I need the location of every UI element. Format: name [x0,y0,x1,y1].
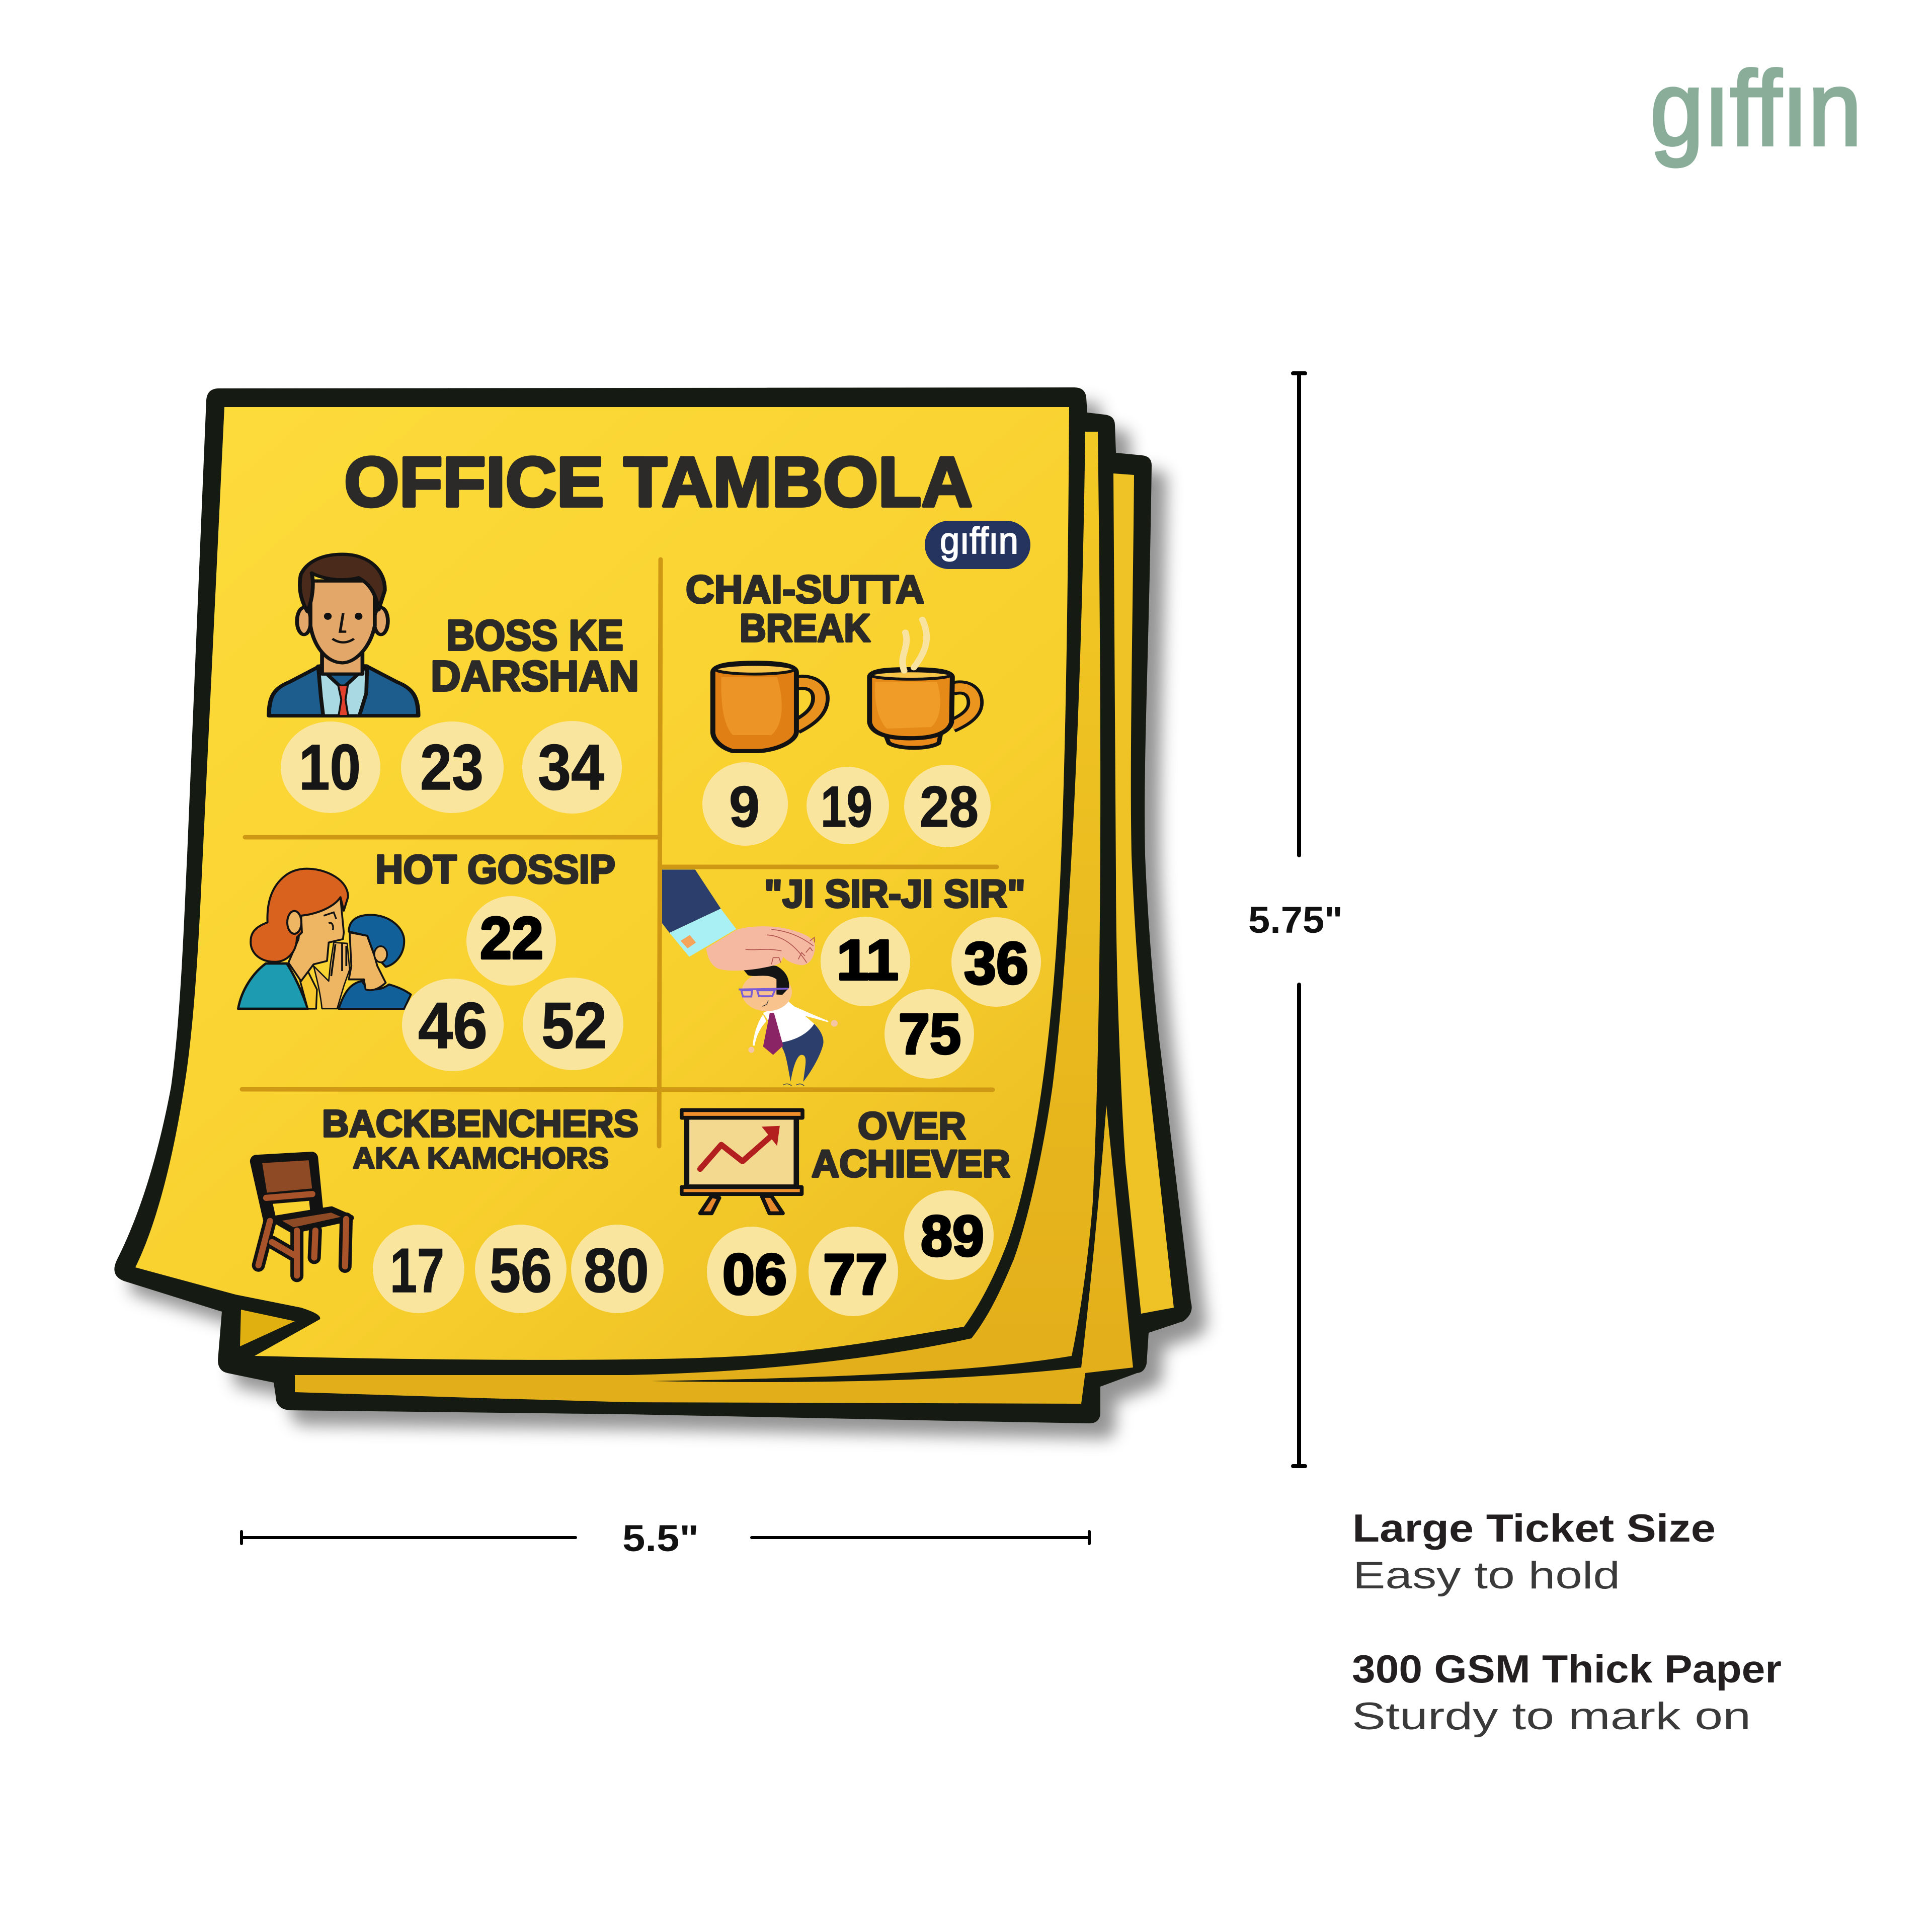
number 10: 10 [299,732,361,803]
panel: chai-sutta break [686,567,991,847]
number 77 [809,1227,898,1316]
number 23: 23 [420,732,484,803]
number 34 [522,721,622,814]
number 17: 17 [390,1236,444,1306]
feature: 300 gsm thick paper [1352,1647,1782,1738]
height dimension: 5.75" [1248,899,1343,941]
back sheet yellow edge [1113,473,1174,1314]
middle sheet yellow edge [295,432,1133,1404]
number 52: 52 [541,989,607,1062]
number 89: 89 [921,1204,984,1268]
number 80 [571,1225,664,1313]
feature: 300 gsm thick paper: Sturdy to mark on [1352,1695,1751,1738]
heading: BREAK [740,606,870,650]
number 06: 06 [722,1243,787,1307]
number 56 [475,1225,567,1313]
number 23 [401,721,504,813]
feature: large ticket size [1352,1506,1716,1597]
heading: CHAI-SUTTA [686,567,924,611]
number 10 [281,721,380,813]
number 75: 75 [899,1002,961,1066]
number 28: 28 [920,775,979,839]
icon: chair [257,1158,351,1275]
number 17 [373,1225,464,1313]
number 36 [951,917,1041,1007]
folded corner triangle [240,1310,295,1346]
panel: backbenchers [257,1102,664,1313]
heading: BOSS KE [446,612,623,660]
number 75 [884,989,974,1079]
panel: ji sir-ji sir [662,869,1041,1086]
number 9 [702,762,788,846]
number 22: 22 [480,905,543,972]
number 22 [466,896,556,986]
top sheet yellow [135,407,1069,1360]
icon: boss [269,554,418,716]
width dimension: 5.5" [622,1517,699,1559]
number 28 [904,765,991,847]
brand badge [925,520,1030,569]
width dimension [242,1517,1089,1559]
heading: AKA KAMCHORS [353,1142,609,1175]
sheet outlines silhouette [114,387,1192,1423]
height dimension [1248,373,1343,1466]
icon: presentation board [682,1110,802,1213]
icon: whispering people [238,869,411,1009]
number 36: 36 [964,930,1028,997]
number 9: 9 [729,775,760,839]
heading: BACKBENCHERS [322,1102,638,1145]
heading: DARSHAN [431,653,639,700]
number 11: 11 [837,928,899,992]
heading: HOT GOSSIP [375,847,615,892]
number 52 [523,978,623,1070]
number 19: 19 [821,775,872,839]
number 11 [821,917,910,1006]
brand badge: gıffın [940,520,1018,561]
ticket stack [114,387,1192,1423]
number 34: 34 [538,732,604,803]
heading [322,1102,638,1175]
panel: over achiever [682,1105,1010,1316]
heading: "JI SIR-JI SIR" [764,871,1025,916]
heading [686,567,924,650]
heading: ACHIEVER [812,1143,1010,1185]
number 46: 46 [418,989,488,1062]
heading [812,1105,1010,1185]
number 56: 56 [490,1236,552,1306]
number 46 [402,979,504,1071]
feature: large ticket size: Easy to hold [1353,1554,1620,1597]
heading: OVER [858,1105,966,1148]
number 80: 80 [584,1236,649,1306]
number 19 [807,767,889,844]
panel: boss ke darshan [269,554,639,814]
feature: 300 gsm thick paper: 300 GSM Thick Paper [1352,1647,1782,1691]
icon: hand patting employee [662,869,838,1086]
heading [431,612,639,700]
feature: large ticket size: Large Ticket Size [1352,1506,1716,1550]
title: OFFICE TAMBOLA [344,442,973,521]
number 06 [707,1227,796,1316]
panel: hot gossip [238,847,623,1071]
icon: mugs [713,619,975,751]
logo: giffin top right: gıffın [1650,49,1862,168]
number 77: 77 [823,1243,888,1307]
number 89 [904,1190,994,1280]
